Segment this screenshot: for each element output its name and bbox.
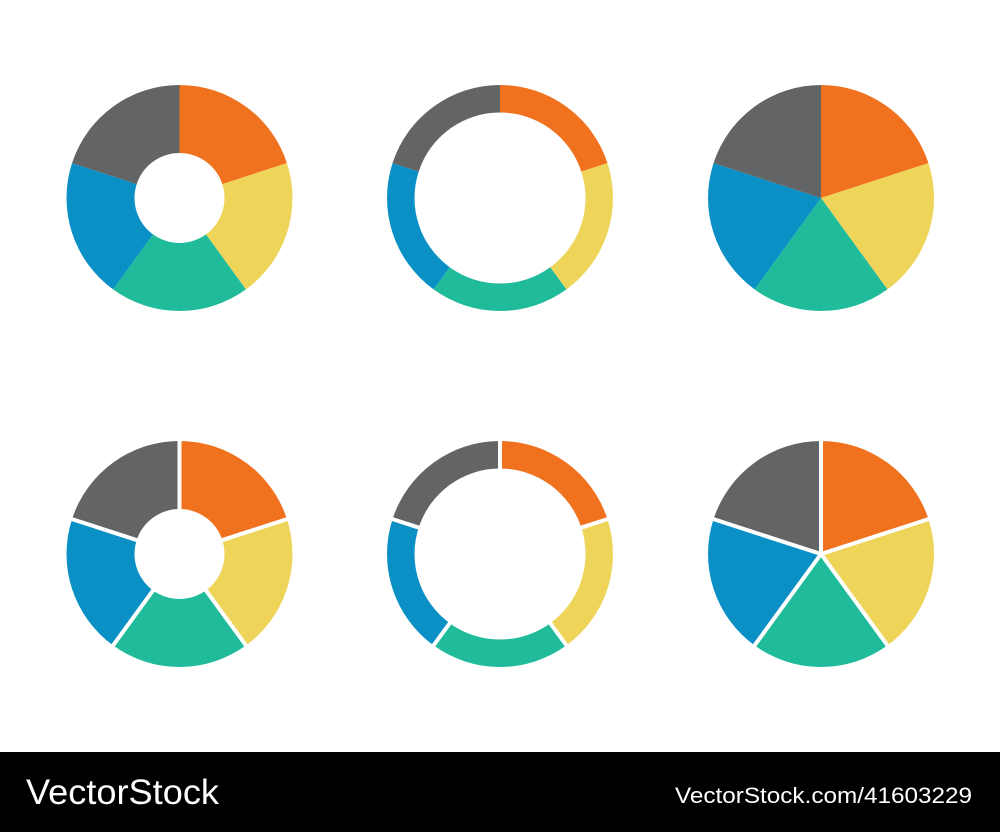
ring chart: bottom center, thin ring with gaps [387, 439, 613, 667]
pie chart: bottom right, with gaps [708, 439, 934, 667]
pie chart: top right [708, 85, 934, 311]
donut chart: top left, thick ring [66, 85, 293, 311]
ring chart: top center, thin ring [387, 85, 613, 311]
footer bar [0, 752, 1000, 832]
footer logo text: VectorStock [26, 773, 220, 812]
donut chart: bottom left, thick ring with gaps [66, 439, 293, 667]
footer image id text: VectorStock.com/41603229 [675, 783, 972, 808]
